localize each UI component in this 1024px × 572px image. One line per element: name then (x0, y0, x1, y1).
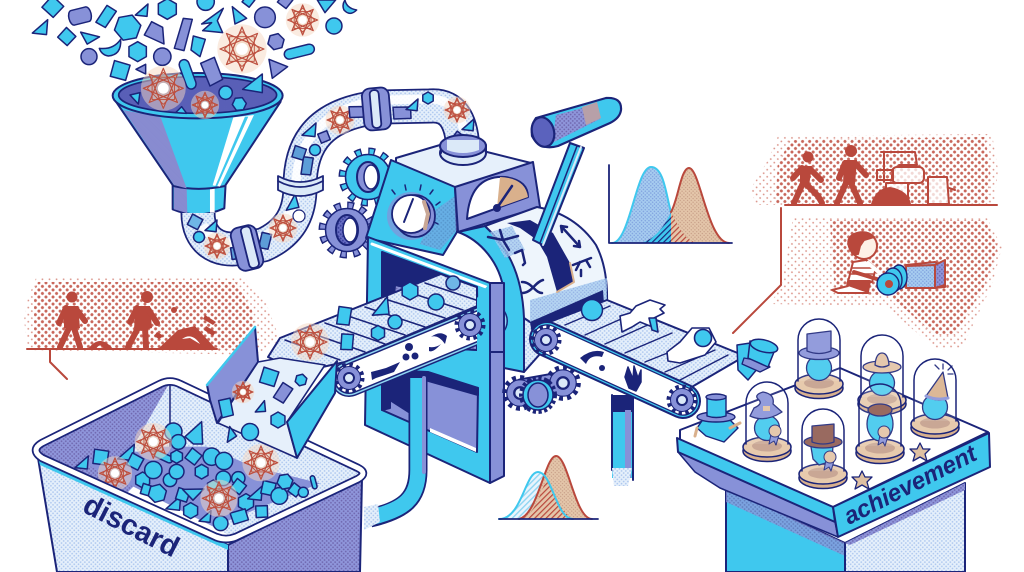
frame side (490, 283, 504, 483)
child figure (832, 232, 881, 293)
belt slats (285, 276, 476, 360)
blue line (612, 167, 671, 243)
drum lever notch edge (557, 263, 574, 292)
right strip lower shading (845, 483, 965, 545)
pipe from funnel to machine (187, 87, 474, 272)
drum lower housing (524, 300, 548, 372)
machine head left face (366, 160, 457, 255)
overlap right (671, 212, 700, 243)
bin corner (169, 386, 171, 450)
pipe flange upper (361, 87, 392, 131)
pipe flange lower (229, 224, 265, 272)
striding figure (837, 145, 866, 203)
roller right (458, 312, 482, 338)
walking figure (793, 152, 822, 203)
frame right pillar mask (477, 283, 490, 358)
belt top surface (547, 300, 745, 388)
baseline (27, 349, 217, 379)
dirt mounds and debris (88, 307, 216, 349)
shapes on chute (219, 367, 308, 443)
funnel cone body (116, 102, 281, 189)
drum face (485, 207, 607, 322)
belt slats (565, 306, 728, 380)
dial knob (387, 185, 440, 240)
dome: party hat (911, 359, 959, 438)
machine sketch (877, 152, 955, 204)
label: discard: discard (78, 489, 184, 564)
pillar right face (845, 483, 965, 572)
head right face (455, 162, 540, 232)
red scene: digging workers panel (24, 278, 280, 379)
large cyan gear (343, 152, 393, 202)
head shading (420, 196, 457, 250)
pipe contents (187, 92, 474, 260)
roller right (670, 388, 694, 412)
ball on belt (582, 300, 602, 320)
chute left wall edge (207, 327, 255, 385)
drum slot (507, 220, 573, 292)
pillar shading (726, 488, 845, 556)
funnel rim (113, 73, 283, 118)
gauge (467, 177, 528, 219)
belt band (547, 339, 683, 401)
window upper (382, 252, 478, 350)
machine head top face (396, 145, 533, 190)
hand picking (620, 300, 665, 332)
dome: pot lid with medal (856, 384, 904, 464)
underside (678, 452, 838, 537)
dome: wizard hat with medal (743, 382, 791, 462)
pillar left face (726, 488, 845, 572)
belt icon: fruit (402, 343, 418, 360)
belt icon: open hand (625, 366, 641, 391)
chute floor (218, 358, 325, 458)
lever handle (528, 98, 621, 149)
drain pipe (364, 378, 424, 530)
red scene: child with toy panel (770, 218, 1002, 348)
worker figure two (128, 291, 157, 347)
table stars (852, 443, 930, 489)
worker figure one (59, 292, 85, 347)
funnel (113, 57, 283, 214)
right strip (833, 433, 990, 537)
chute left wall (207, 327, 258, 423)
belt top surface (268, 274, 477, 372)
bin rim (36, 382, 363, 539)
pile of shapes (75, 422, 320, 531)
funnel neck collar (173, 183, 226, 214)
leg under conveyor (612, 395, 633, 486)
overlap (521, 480, 572, 519)
conveyor: right (534, 300, 745, 412)
flying shapes entering funnel (32, 0, 357, 81)
frame front (365, 237, 490, 483)
ground line with callout leader (733, 205, 997, 333)
items on belt (291, 276, 460, 361)
bin left face (38, 458, 228, 572)
blue area (499, 472, 552, 519)
toy box (906, 260, 945, 288)
window lower (382, 370, 478, 452)
table top (680, 368, 988, 507)
belt icon: eye (429, 333, 447, 351)
bin interior back right (120, 382, 362, 536)
left strip (677, 438, 835, 522)
bin interior back left (38, 382, 170, 520)
drum shading (490, 226, 607, 322)
machine (364, 98, 633, 530)
bell curve chart: lower (499, 456, 598, 519)
pipe entry collar (440, 135, 486, 165)
belt band (349, 321, 490, 379)
red line (519, 456, 592, 519)
dome: brown hat with medal (799, 409, 847, 488)
roller left (336, 366, 362, 390)
periwinkle gear (323, 206, 371, 254)
lever arm (533, 143, 584, 246)
bell curve chart: upper (609, 165, 732, 243)
overlap left (640, 212, 671, 243)
red curve area (671, 168, 729, 243)
belt icon: hand (371, 362, 400, 380)
baseline (499, 518, 598, 520)
belt icon: reaching hand (580, 351, 604, 364)
achievement table (677, 368, 990, 572)
blue curve area (612, 167, 671, 243)
red line (671, 168, 729, 243)
axes (609, 165, 732, 243)
pipe clamp (278, 176, 323, 196)
chute (207, 327, 337, 458)
shapes inside funnel (130, 57, 262, 119)
lower drive gears (506, 369, 577, 411)
drum cyan rim (458, 226, 524, 372)
dome: top hat (795, 319, 843, 398)
conveyor: left (268, 274, 504, 390)
bin right face (228, 478, 362, 572)
bin cyan rim under (38, 458, 228, 550)
hand with ball (667, 328, 716, 363)
item on table: hatted figure (695, 394, 740, 442)
drum opening (530, 290, 604, 335)
discard bin (36, 382, 363, 572)
drum direction icons (488, 226, 591, 293)
dome: sombrero (858, 335, 906, 414)
gear pair behind machine (323, 152, 393, 254)
red area (519, 456, 590, 519)
label: achievement: achievement (839, 440, 982, 530)
red scene: workers with machine panel (733, 134, 998, 333)
blue line (499, 472, 573, 519)
chute right wall (287, 361, 337, 458)
frame highlight (372, 244, 486, 287)
roller left (534, 328, 558, 352)
toy wheel (877, 265, 907, 295)
item on conveyor: top hat (737, 337, 779, 380)
